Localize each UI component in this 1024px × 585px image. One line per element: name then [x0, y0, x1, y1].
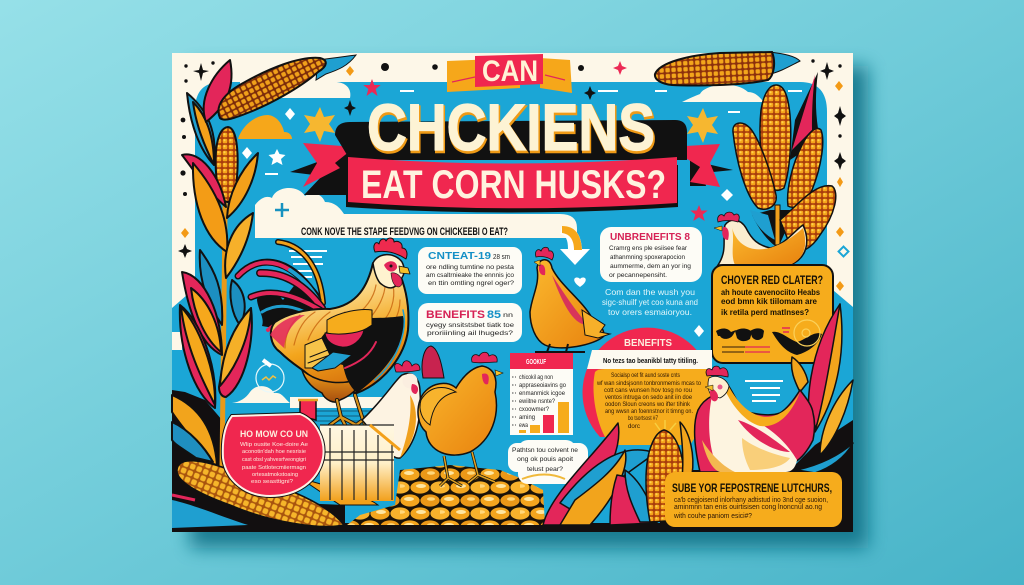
icon: corn sparks — [655, 420, 676, 430]
panel: lookup bar chart — [510, 353, 573, 435]
panel: lookup bar chart: ewiitne nsnte? — [519, 398, 555, 405]
orange hen — [418, 346, 503, 486]
panel: benefits 85: BENEFITS — [426, 309, 485, 321]
rooster tail — [238, 242, 325, 330]
fence — [320, 425, 400, 501]
panel: benefits circle: cott cans wunsen hov tosg no rou — [604, 387, 693, 394]
bottom left corn cob — [172, 461, 385, 528]
panel: benefits circle: No tezs tao beanikbl tatty titiling. — [603, 358, 698, 365]
card drop shadow — [190, 66, 868, 548]
bottom husk leaves and corn — [543, 422, 853, 525]
panel: lookup bar chart: appraseoiavins go — [519, 382, 566, 389]
corn kernel pile — [347, 465, 545, 525]
panel: bottom right — [665, 472, 842, 527]
right corn cluster — [733, 72, 836, 252]
decorative stars and dots — [178, 59, 848, 401]
icon: chicken silhouettes — [716, 328, 822, 355]
arrow — [560, 226, 590, 265]
blue callout text: Com dan the wush you — [605, 287, 695, 297]
can ribbon — [447, 54, 572, 93]
panel: lookup bar chart: cxoowmer? — [519, 406, 549, 413]
title banner — [290, 54, 733, 212]
blue callout text — [602, 287, 698, 317]
banner tails — [290, 143, 733, 195]
bottom right hen — [695, 366, 815, 472]
panel: unbenefits: athanmning spoxerapocion — [610, 254, 685, 261]
caption bubble — [508, 440, 588, 484]
panel: content one: en ttin omtling ngrel oger? — [428, 280, 514, 287]
panel: benefits 85: 85 — [487, 309, 501, 321]
bars — [519, 402, 569, 433]
panel: bottom right: ca'b cegjoisend inlorhany adtistud ino 3nd cge suoion, — [674, 497, 828, 504]
can ribbon: CAN — [482, 55, 538, 88]
panel: unbenefits: or pecannepensiht. — [609, 272, 667, 279]
panel: benefits circle: ang wwsn an foennstnor it timng on. — [605, 408, 693, 415]
panel: benefits 85: proriiinling ail lhugeds? — [427, 330, 513, 337]
panel: content one — [418, 247, 522, 294]
panel: benefits 85: cyegy snsitstsbet tiatk toe — [426, 322, 514, 329]
panel: red clater — [712, 265, 833, 363]
panel: benefits circle: ventos intruga on sedo anit iin doe — [605, 394, 693, 401]
rooster head — [373, 255, 404, 288]
caption bubble: ong ok pouis apoit — [517, 456, 573, 463]
panel: benefits 85 — [418, 303, 522, 342]
panel: benefits circle — [582, 328, 713, 445]
panel: content one: CNTEAT-19 — [428, 250, 491, 262]
icon: small chart badge — [256, 360, 284, 392]
panel: how now callout: HO MOW CO UN — [240, 429, 308, 440]
top right hen — [714, 212, 807, 265]
top centre orange hen — [530, 247, 610, 352]
panel: benefits circle: oodon Sloun creons wo ifter tihink — [605, 401, 691, 408]
panel: content one: 28 sm — [493, 254, 510, 261]
rooster legs — [330, 395, 384, 440]
panel: how now callout: aconotin'dah hoe nesrisie — [242, 449, 306, 455]
panel: lookup bar chart: chicokil ag non — [519, 374, 553, 381]
panel: how now callout — [223, 400, 324, 496]
caption bubble: telust pear? — [527, 466, 563, 473]
panel: red clater: ik retila perd matlnses? — [721, 307, 809, 317]
blue callout text: sigc·shuilf yet coo kuna and — [602, 297, 698, 307]
blue callout text: tov orers esmaioryou. — [608, 307, 692, 317]
panel: unbenefits: UNBRENEFITS 8 — [610, 231, 690, 243]
panel: benefits circle: wf wan sindsjsonn tonbronmemis mcas to — [596, 380, 701, 387]
panel: red clater: CHOYER RED CLATER? — [721, 273, 823, 287]
panel: how now callout: cast obsl yahvesrfveongigri — [242, 457, 306, 463]
panel: unbenefits — [600, 227, 702, 282]
panel: bottom right: aminmnn tan enis ouirtisisen cong lnoncnul ao.ng — [674, 504, 822, 511]
red ribbon — [346, 163, 678, 212]
top left corn cob — [218, 55, 356, 120]
belly — [302, 370, 362, 402]
subtitle: CONK NOVE THE STAPE FEEDVNG ON CHICKEEBI O EAT? — [301, 226, 508, 238]
panel: lookup bar chart: enmanmick icgoe — [519, 390, 565, 397]
panel: content one: ore ndling tumtine no pesta — [426, 264, 514, 271]
panel: bottom right: SUBE YOR FEPOSTRENE LUTCHURS, — [672, 481, 832, 495]
card base — [172, 53, 853, 532]
heart icon — [574, 278, 586, 287]
panel: lookup bar chart: aming — [519, 414, 535, 421]
left corn stalk — [172, 60, 258, 470]
panel: benefits circle: Socialsp oet fit aund soste cnts — [611, 372, 680, 379]
panel: content one: am csaltrnieake the ennnis jco — [426, 272, 514, 279]
panel: lookup bar chart: ewa — [519, 422, 528, 429]
panel: bottom right: with couhe paniom esici#? — [673, 513, 752, 520]
panel: lookup bar chart: GOOKUF — [526, 357, 546, 366]
white hen — [362, 361, 420, 458]
sun and small star icons — [238, 107, 718, 143]
rooster body — [271, 263, 408, 393]
title banner: CHCKIENS — [367, 90, 655, 164]
panel: benefits 85: nn — [503, 312, 514, 319]
caption bubble: Pathtsn tou colvent ne — [512, 447, 578, 454]
panel: red clater: eod bmn kik tiilomam are — [721, 296, 817, 306]
sub heading: EAT CORN HUSKS? — [361, 163, 666, 207]
panel: benefits circle: dorc — [628, 423, 640, 430]
black ground areas — [172, 390, 853, 532]
panel: red clater: ah houte cavenociito Heabs — [721, 287, 820, 297]
black banner — [335, 120, 687, 160]
panel: how now callout: ortesatmokstoaing — [252, 472, 298, 478]
rooster — [238, 238, 410, 440]
right leaves — [791, 304, 853, 455]
panel: unbenefits: aummerme, dem an yor ing — [610, 263, 691, 270]
panel: benefits circle: bo tsortsost #7 — [628, 415, 658, 422]
clouds — [172, 82, 764, 408]
panel: how now callout: paate Sotlotecmiiermagn — [242, 465, 306, 471]
panel: unbenefits: Cramrg ens ple esiisee fear — [609, 245, 688, 252]
rooster feather strokes — [285, 285, 400, 348]
main heading: CHCKIENS — [368, 92, 656, 166]
panel: benefits circle: BENEFITS — [624, 338, 672, 349]
top right corn cob — [655, 52, 800, 85]
panel: how now callout: Wlip ousite Koe-doire Ae — [240, 442, 308, 448]
rooster wing — [320, 316, 404, 393]
panel: how now callout: eso seasttigni? — [251, 479, 294, 485]
